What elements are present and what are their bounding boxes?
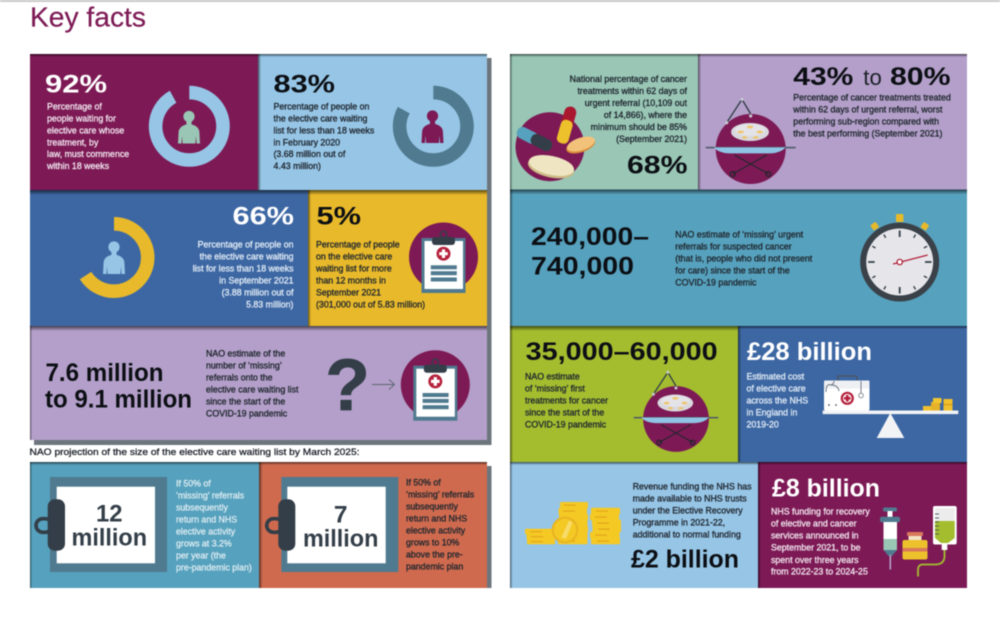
description: 12 million: subsequently — [176, 503, 228, 513]
description: 92%: Percentage of — [47, 102, 102, 112]
description: 8 billion: spent over three years — [771, 555, 859, 565]
description: 12 million: ‘missing’ referrals — [176, 491, 245, 501]
description: missing first treatments: since the start of the — [525, 408, 604, 418]
description: 7 million: grows to 10% — [406, 537, 459, 547]
description: 12 million: elective activity — [176, 527, 236, 537]
description: 83%: list for less than 18 weeks — [274, 125, 375, 135]
description: 28 billion: Estimated cost — [746, 372, 805, 382]
description: 2 billion: additional to normal funding — [633, 530, 741, 540]
description: 8 billion: September 2021, to be — [771, 543, 861, 553]
icon: operating lamp and table — [634, 371, 718, 452]
description: 5%: (301,000 out of 5.83 million) — [316, 300, 425, 310]
icon: waiting sign 7 million — [267, 477, 398, 572]
description: 8 billion: NHS funding for recovery — [771, 507, 870, 517]
statistic: 83%: 83% — [274, 71, 335, 99]
icon: person — [422, 110, 444, 143]
description: missing referrals: referrals onto the — [206, 372, 273, 382]
icon: balance scale with medical kit and coins — [823, 376, 958, 438]
description: 12 million: grows at 3.2% — [176, 539, 232, 549]
icon: question mark: ? — [325, 345, 370, 426]
description: missing referrals: COVID-19 pandemic — [206, 408, 288, 418]
description: 66%: the elective care waiting — [200, 252, 294, 262]
statistic: 5%: 5% — [316, 202, 361, 230]
panel: 8 billion — [758, 462, 967, 588]
statistic: 68%: 68% — [627, 151, 688, 179]
description: missing urgent referrals: referrals for suspected cancer — [675, 242, 792, 252]
panel: 28 billion — [738, 326, 967, 462]
description: 7 million: elective activity — [406, 525, 466, 535]
description: 5%: waiting list for more — [315, 263, 392, 273]
description: missing urgent referrals: (that is, people who did not present — [675, 254, 813, 264]
description: 83%: the elective care waiting — [274, 113, 367, 123]
statistic: 66%: 66% — [232, 202, 294, 230]
description: 7 million: pandemic plan — [406, 561, 463, 571]
icon: operating lamp and table — [706, 98, 796, 184]
left column drop shadows — [34, 58, 492, 588]
description: missing referrals: elective care waiting list — [206, 384, 299, 394]
description: 66%: (3.88 million out of — [222, 288, 294, 298]
panel: 83 percent — [258, 54, 487, 190]
icon: person — [178, 111, 200, 144]
description: 28 billion: across the NHS — [746, 396, 808, 406]
description: 92%: treatment, by — [47, 137, 99, 147]
description: 43% to 80%: performing sub-region compared with — [793, 117, 939, 127]
description: 68%: treatments within 62 days of — [577, 86, 688, 96]
statistic: 43% to 80%: to — [863, 65, 882, 90]
description: 28 billion: 2019-20 — [746, 420, 779, 430]
description: 5%: September 2021 — [316, 288, 381, 298]
description: missing referrals: NAO estimate of the — [206, 348, 285, 358]
icon: medicine bottle — [902, 532, 928, 560]
description: 66%: 5.83 million) — [246, 300, 294, 310]
arrow — [372, 380, 394, 390]
icon: person — [103, 241, 125, 274]
description: 68%: urgent referral (10,109 out — [585, 98, 688, 108]
description: 12 million: If 50% of — [176, 479, 211, 489]
description: 43% to 80%: the best performing (September 2021) — [793, 129, 943, 139]
description: 7 million: subsequently — [406, 501, 458, 511]
description: 83%: (3.68 million out of — [274, 149, 346, 159]
statistic: 43% to 80%: 80% — [890, 63, 950, 91]
icon: clipboard — [409, 222, 478, 293]
description: 92%: law, must commence — [47, 149, 129, 159]
description: 68%: (September 2021) — [616, 134, 687, 144]
description: 92%: within 18 weeks — [46, 161, 110, 171]
statistic: £2 billion: £2 billion — [631, 545, 739, 573]
panel: 92 percent — [30, 54, 258, 190]
description: 2 billion: made available to NHS trusts — [633, 494, 747, 504]
description: 5%: than 12 months in — [316, 275, 386, 285]
description: 5%: on the elective care — [316, 252, 392, 262]
donut chart: 92% — [156, 93, 223, 160]
top page rule — [0, 0, 1000, 2]
panel: 66 percent — [30, 190, 308, 326]
statistic: 35,000–60,000: 35,000–60,000 — [526, 338, 718, 366]
description: missing urgent referrals: for care) since the start of the — [675, 265, 790, 275]
description: 43% to 80%: Percentage of cancer treatments treated — [793, 93, 951, 103]
statistic: 43% to 80% — [793, 63, 950, 91]
statistic: 240,000–740,000: 240,000– — [531, 223, 649, 251]
panel: missing referrals — [30, 326, 487, 440]
description: 7 million: return and NHS — [406, 513, 467, 523]
donut chart: 66% — [80, 224, 148, 291]
description: 66%: in September 2021 — [219, 275, 294, 285]
icon: IV drip bag — [918, 506, 957, 576]
projection heading: NAO projection of the size of the elective care waiting list by March 2025: — [30, 447, 360, 458]
description: 7 million: ‘missing’ referrals — [406, 489, 475, 499]
description: 68%: of 14,866), where the — [604, 110, 687, 120]
icon: pills — [515, 105, 597, 182]
panel: 43 to 80 percent — [698, 54, 967, 190]
panel: 7 million projection — [259, 462, 487, 588]
description: missing first treatments: COVID-19 pandemic — [525, 420, 607, 430]
description: missing referrals: since the start of the — [206, 396, 285, 406]
description: 2 billion: Programme in 2021-22, — [633, 518, 725, 528]
description: 7 million: If 50% of — [406, 477, 441, 487]
donut chart: 83% — [400, 93, 467, 160]
panel: 2 billion — [510, 462, 758, 588]
description: missing first treatments: of ‘missing’ first — [525, 384, 585, 394]
description: 92%: elective care whose — [47, 125, 124, 135]
description: 28 billion: of elective care — [746, 384, 806, 394]
icon: waiting sign 7 million: 7 — [334, 502, 348, 529]
icon: waiting sign 7 million: million — [303, 526, 378, 553]
description: 68%: minimum should be 85% — [591, 122, 687, 132]
description: 5%: Percentage of people — [316, 240, 400, 250]
statistic: 43% to 80%: 43% — [793, 63, 853, 91]
icon: waiting sign 12 million: 12 — [96, 501, 123, 528]
description: 83%: Percentage of people on — [274, 102, 369, 112]
icon: waiting sign 12 million — [36, 477, 167, 572]
icon: syringe — [880, 508, 900, 570]
description: 66%: list for less than 18 weeks — [193, 263, 294, 273]
statistic: 240,000–740,000: 740,000 — [531, 252, 634, 280]
description: 8 billion: services announced in — [771, 530, 859, 540]
panel: 5 percent — [308, 190, 487, 326]
icon: stopwatch — [860, 214, 939, 302]
statistic: 7.6 to 9.1 million: to 9.1 million — [45, 385, 192, 413]
description: 43% to 80%: within 62 days of urgent referral, worst — [792, 104, 943, 114]
description: missing first treatments: treatments for cancer — [525, 396, 608, 406]
description: 83%: in February 2020 — [274, 137, 340, 147]
description: 8 billion: of elective and cancer — [771, 518, 857, 528]
description: 2 billion: under the Elective Recovery — [633, 506, 743, 516]
icon: coin stacks — [525, 502, 621, 544]
description: 8 billion: from 2022-23 to 2024-25 — [771, 566, 868, 576]
panel: missing urgent referrals — [510, 190, 967, 326]
description: 92%: people waiting for — [47, 113, 116, 123]
description: 68%: National percentage of cancer — [570, 74, 687, 84]
description: 28 billion: in England in — [746, 408, 797, 418]
description: missing urgent referrals: COVID-19 pandemic — [675, 277, 757, 287]
icon: clipboard — [401, 350, 470, 421]
description: 83%: 4.43 million) — [274, 161, 321, 171]
description: 12 million: return and NHS — [176, 515, 237, 525]
description: 12 million: per year (the — [176, 551, 226, 561]
statistic: £28 billion: £28 billion — [747, 338, 872, 366]
description: missing first treatments: NAO estimate — [525, 372, 580, 382]
panel: 12 million projection — [30, 462, 259, 588]
statistic: 7.6 to 9.1 million: 7.6 million — [46, 359, 164, 387]
description: 66%: Percentage of people on — [198, 240, 294, 250]
panel: missing first treatments — [510, 326, 738, 462]
statistic: £8 billion: £8 billion — [772, 475, 880, 503]
statistic: 92%: 92% — [45, 71, 107, 99]
description: missing referrals: number of ‘missing’ — [206, 360, 282, 370]
description: missing urgent referrals: NAO estimate of ‘missing’ urgent — [675, 230, 804, 240]
description: 2 billion: Revenue funding the NHS has — [633, 482, 752, 492]
title: Key facts — [30, 2, 146, 32]
description: 12 million: pre-pandemic plan) — [176, 563, 252, 573]
description: 7 million: above the pre- — [406, 549, 463, 559]
icon: waiting sign 12 million: million — [72, 525, 147, 552]
panel: 68 percent — [510, 54, 698, 190]
